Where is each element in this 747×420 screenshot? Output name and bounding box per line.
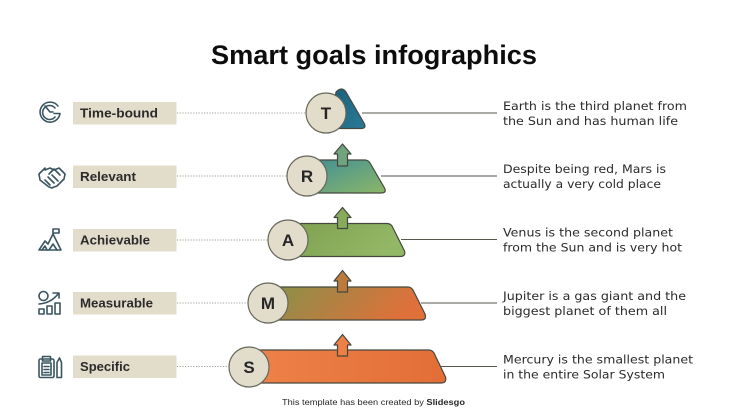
letter badge: R: [287, 156, 327, 196]
description: Earth is the third planet from: [503, 99, 687, 113]
arrow up: [334, 334, 351, 356]
icon: mountain flag: [39, 229, 61, 250]
leader line: [401, 238, 497, 240]
leader line: [421, 302, 497, 304]
label: Relevant: Relevant: [80, 169, 137, 184]
footer credit: This template has been created by Slidesgo: [282, 397, 465, 407]
leader line: [362, 112, 497, 114]
letter badge: T: [306, 93, 346, 133]
label: Specific: [73, 356, 176, 378]
description: from the Sun and is very hot: [503, 240, 683, 254]
leader line: [441, 366, 497, 368]
arrow up: [334, 144, 351, 166]
letter badge: R: R: [301, 167, 313, 186]
leader line: [381, 175, 497, 177]
description: Jupiter is a gas giant and the: [502, 289, 686, 303]
description: Mercury is the smallest planet: [503, 352, 694, 366]
letter badge: M: [248, 283, 288, 323]
icon: handshake: [39, 168, 65, 188]
description: Despite being red, Mars is: [503, 162, 666, 176]
arrow up: [334, 208, 351, 228]
icon: clipboard and pencil: [39, 356, 62, 378]
letter badge: S: [229, 347, 269, 387]
stepped shape: T: [330, 89, 365, 128]
description: actually a very cold place: [503, 177, 661, 191]
icon: clock: [40, 102, 60, 122]
row: Relevant: [39, 144, 666, 196]
label: Measurable: [73, 292, 176, 314]
label: Achievable: [73, 229, 176, 252]
dotted connector: [177, 302, 248, 304]
row: Achievable: [39, 208, 683, 260]
arrow up: [334, 270, 351, 292]
letter badge: S: S: [243, 358, 255, 377]
dotted connector: [177, 112, 306, 114]
label: Relevant: [73, 166, 176, 188]
description: biggest planet of them all: [503, 304, 667, 318]
title: Smart goals infographics: [211, 40, 537, 70]
row: Measurable: [39, 270, 686, 323]
letter badge: T: T: [321, 104, 332, 123]
row: Specific: [39, 334, 694, 387]
description: the Sun and has human life: [503, 114, 678, 128]
stepped shape: R: [307, 160, 385, 193]
row: Time-bound: [40, 89, 687, 133]
letter badge: A: [268, 220, 308, 260]
letter badge: A: A: [282, 231, 294, 250]
icon: chart with coin: [39, 292, 60, 314]
dotted connector: [177, 175, 287, 177]
stepped shape: S: [249, 350, 446, 383]
dotted connector: [177, 239, 268, 241]
label: Time-bound: Time-bound: [80, 106, 158, 120]
stepped shape: M: [268, 287, 426, 320]
description: Venus is the second planet: [503, 226, 674, 240]
label: Measurable: Measurable: [80, 296, 153, 310]
dotted connector: [177, 366, 229, 368]
label: Time-bound: [73, 102, 176, 124]
letter badge: M: M: [261, 294, 275, 313]
stepped shape: A: [288, 224, 405, 256]
label: Achievable: Achievable: [80, 232, 150, 248]
description: in the entire Solar System: [503, 368, 665, 382]
label: Specific: Specific: [80, 359, 130, 374]
